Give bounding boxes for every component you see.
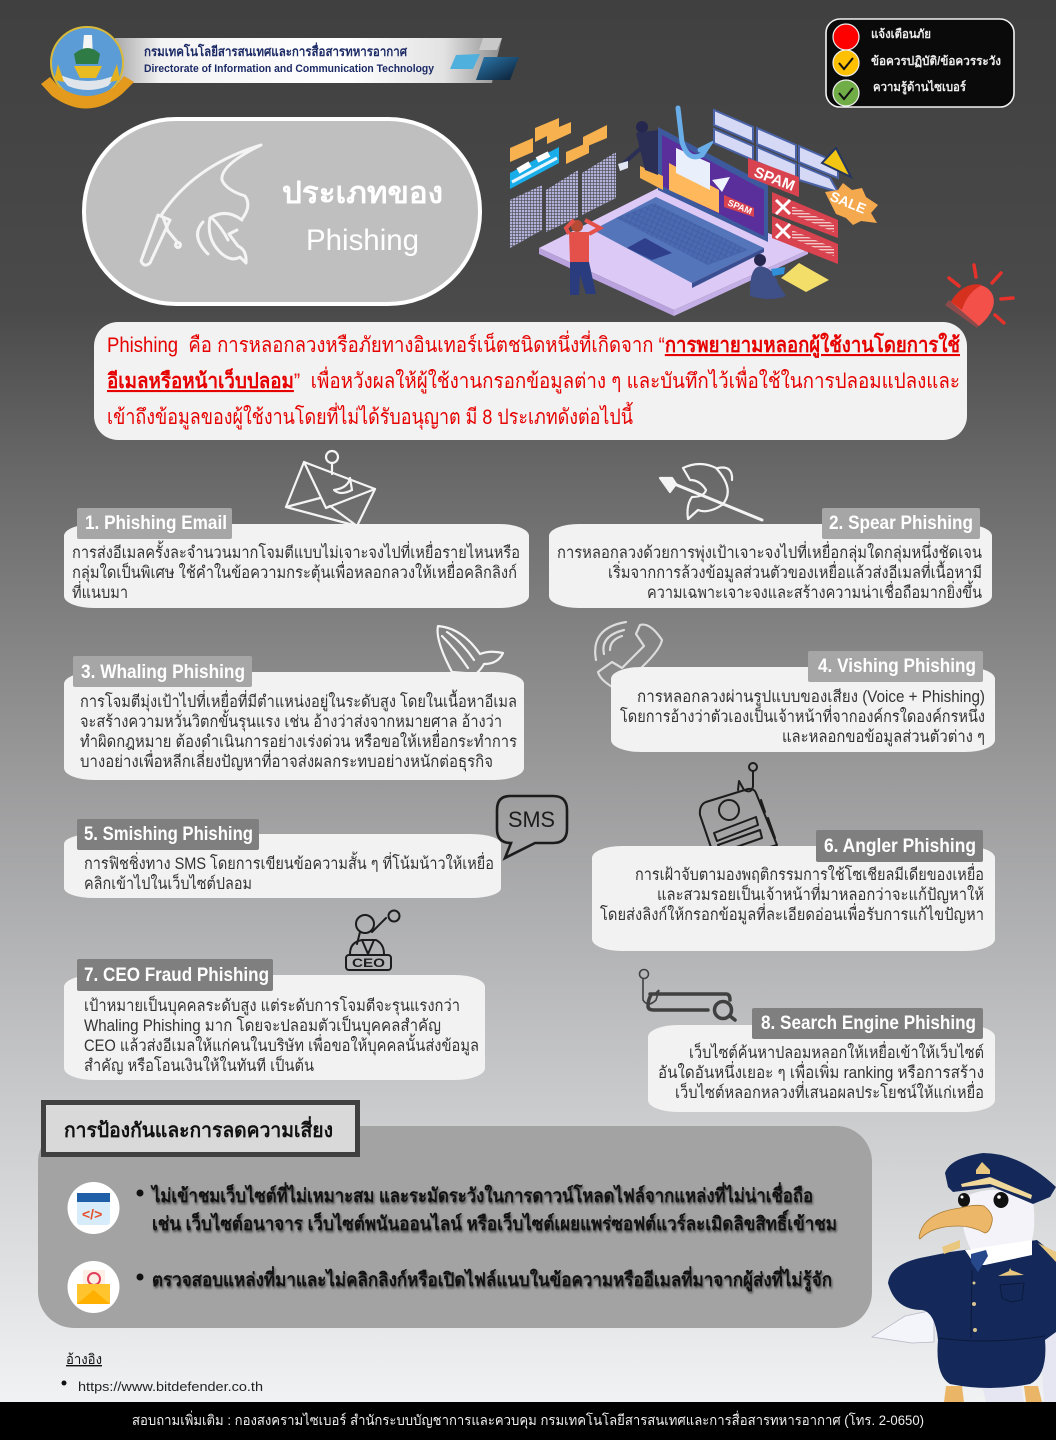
card 8: Search Engine Phishing (648, 1008, 995, 1112)
tag (822, 508, 980, 539)
tag: 1. Phishing Email (85, 513, 227, 534)
tag: 4. Vishing Phishing (818, 656, 976, 677)
card 6: Angler Phishing (592, 830, 995, 951)
platform (539, 187, 808, 310)
description: Whaling Phishing มาก โดยจะปลอมตัวเป็นบุคคลสำคัญ (84, 1015, 441, 1036)
icon: fishing rod and fish (141, 145, 261, 265)
description: เว็บไซต์ค้นหาปลอมหลอกให้เหยื่อเข้าให้เว็บไซต์ (689, 1041, 984, 1062)
intro line 2: อีเมลหรือหน้าเว็บปลอม” เพื่อหวังผลให้ผู้ใช้งานกรอกข้อมูลต่าง ๆ และบันทึกไว้เพื่อใช้ในการปลอมแปลงและ (107, 366, 960, 394)
laptop screen (658, 127, 768, 242)
hacker at screen (618, 121, 658, 175)
icon: email with hook (286, 451, 375, 526)
footer bar (0, 1402, 1056, 1440)
collar and tie (965, 1240, 1032, 1272)
description: คลิกเข้าไปในเว็บไซต์ปลอม (84, 873, 252, 893)
icon: SMS speech bubble: SMS (508, 807, 555, 832)
description: การหลอกลวงด้วยการพุ่งเป้าเจาะจงไปที่เหยื่อกลุ่มใดกลุ่มหนึ่งชัดเจน (557, 541, 982, 563)
icon: speared fish (660, 464, 762, 520)
virus warning panels (772, 192, 838, 264)
tag: 5. Smishing Phishing (84, 824, 253, 845)
description: และสวมรอยเป็นเจ้าหน้าที่มาหลอกว่าจะแก้ปัญหาให้ (657, 883, 984, 904)
description: บางอย่างเพื่อหลีกเลี่ยงปัญหาที่อาจส่งผลกระทบอย่างหนักต่อธุรกิจ (80, 750, 493, 772)
header logo banner (41, 27, 519, 109)
bullet 1 (136, 1182, 837, 1235)
icon: CEO figure: CEO (352, 956, 385, 970)
description (80, 689, 517, 772)
description: การหลอกลวงผ่านรูปแบบของเสียง (Voice + Phishing) (637, 688, 985, 707)
description (72, 540, 520, 602)
description: การเฝ้าจับตามองพฤติกรรมการใช้โซเชียลมีเดียของเหยื่อ (635, 863, 984, 884)
beak (919, 1205, 992, 1239)
description: การฟิชชิ่งทาง SMS โดยการเขียนข้อความสั้น ๆ ที่โน้มน้าวให้เหยื่อ (84, 851, 494, 873)
air force emblem (41, 27, 134, 109)
intro text box (94, 322, 967, 440)
tag (77, 959, 273, 991)
description (620, 688, 985, 747)
icon: code window: </> (82, 1206, 102, 1222)
intro line 1: Phishing คือ การหลอกลวงหรือภัยทางอินเทอร์เน็ตชนิดหนึ่งที่เกิดจาก “การพยายามหลอกผู้ใช้งานโดยการใช้ (107, 330, 960, 359)
description: โดยส่งลิงก์ให้กรอกข้อมูลที่ละเอียดอ่อนเพื่อรับการแก้ไขปัญหา (600, 903, 984, 925)
panel: prevention and risk reduction (38, 1102, 872, 1328)
tag (77, 508, 232, 539)
title Phishing: Phishing (306, 224, 419, 257)
icon: CEO figure (346, 910, 400, 970)
tag (816, 830, 983, 862)
description: เริ่มจากการล้วงข้อมูลส่วนตัวของเหยื่อแล้วส่งอีเมลที่เนื้อหามี (608, 560, 982, 583)
spam tags: SPAM (726, 198, 753, 216)
cap (945, 1153, 1056, 1204)
epaulettes (942, 1240, 1056, 1262)
legend: knowledge: ความรู้ด้านไซเบอร์ (873, 79, 967, 95)
title pill (84, 119, 480, 304)
department name English: Directorate of Information and Communication Technology (144, 63, 435, 75)
sale burst: SALE (828, 188, 868, 217)
tag: 8. Search Engine Phishing (761, 1013, 976, 1034)
warning triangle (822, 148, 851, 177)
description (84, 995, 479, 1075)
seated hacker (750, 254, 786, 299)
icon: code window (68, 1182, 120, 1234)
wing (872, 1310, 934, 1343)
decorative chips (450, 38, 519, 80)
intro line 3: เข้าถึงข้อมูลของผู้ใช้งานโดยที่ไม่ได้รับอนุญาต มี 8 ประเภทดังต่อไปนี้ (107, 402, 633, 430)
icon: profile card with hook (700, 763, 777, 862)
legend: warning: แจ้งเตือนภัย (871, 27, 931, 41)
department name Thai: กรมเทคโนโลยีสารสนเทศและการสื่อสารทหารอากาศ (144, 42, 408, 59)
sale burst (825, 183, 878, 225)
legend: advice (833, 50, 1001, 76)
description: การส่งอีเมลครั้งละจำนวนมากโจมตีแบบไม่เจาะจงไปที่เหยื่อรายไหนหรือ (72, 540, 520, 562)
description: อันใดอันหนึ่งเยอะ ๆ เพื่อเพิ่ม ranking หรือการสร้าง (658, 1061, 984, 1082)
banner ribbon (115, 38, 502, 83)
spam windows (714, 110, 838, 192)
footer bar: สอบถามเพิ่มเติม : กองสงครามไซเบอร์ สำนักระบบบัญชาการและควบคุม กรมเทคโนโลยีสารสนเทศและการสื่อสารทหารอากาศ (โทร. 2-0650) (132, 1411, 924, 1429)
description: CEO แล้วส่งอีเมลให้แก่คนในบริษัท เพื่อขอให้บุคคลนั้นส่งข้อมูล (84, 1033, 479, 1056)
legs (944, 1386, 1042, 1402)
head (960, 1190, 1034, 1258)
tag: 3. Whaling Phishing (81, 662, 245, 683)
card 5: Smishing Phishing (64, 819, 501, 898)
card 3: Whaling Phishing (64, 656, 524, 780)
reference link: https://www.bitdefender.co.th (78, 1379, 263, 1394)
card 2: Spear Phishing (549, 508, 992, 608)
tag (73, 656, 252, 687)
icon: search bar with hook (640, 970, 735, 1020)
icon: fishing hook (678, 108, 708, 157)
yellow folder (781, 263, 829, 292)
badge and buttons (938, 1268, 1045, 1341)
description: ทำผิดกฎหมาย ต้องดำเนินการอย่างเร่งด่วน หรือขอให้เหยื่อกระทำการ (80, 730, 517, 751)
legend: knowledge (833, 79, 967, 106)
tag (808, 651, 983, 682)
prevention heading (44, 1102, 358, 1154)
description: ที่แนบมา (72, 581, 128, 602)
legend: warning (833, 24, 931, 50)
icon: phone with signal (595, 622, 662, 688)
icon: alarm light (945, 265, 1013, 328)
title Thai: ประเภทของ (282, 177, 443, 210)
spam tags: SPAM (752, 164, 797, 195)
laptop base (593, 197, 764, 288)
icon: whale (438, 626, 503, 674)
body (888, 1240, 1056, 1388)
icon: SMS speech bubble (497, 796, 567, 858)
reference heading: อ้างอิง (66, 1351, 102, 1367)
card 4: Vishing Phishing (611, 651, 995, 752)
description: เว็บไซต์หลอกหลวงที่เสนอผลประโยชน์ให้แก่เหยื่อ (675, 1081, 984, 1102)
spam tags (724, 158, 799, 217)
tag: 2. Spear Phishing (829, 513, 973, 534)
mascot: seagull pilot (872, 1153, 1056, 1402)
description (600, 863, 984, 925)
bullet 1: เช่น เว็บไซต์อนาจาร เว็บไซต์พนันออนไลน์ หรือเว็บไซต์เผยแพร่ซอฟต์แวร์ละเมิดลิขสิทธิ์เข้าชม (152, 1209, 837, 1235)
description: การโจมตีมุ่งเป้าไปที่เหยื่อที่มีตำแหน่งอยู่ในระดับสูง โดยในเนื้อหาอีเมล (80, 689, 517, 712)
description: กลุ่มใดเป็นพิเศษ ใช้คำในข้อความกระตุ้นเพื่อหลอกลวงให้เหยื่อคลิกลิงก์ (72, 561, 517, 583)
description (557, 541, 982, 602)
description: ความเฉพาะเจาะจงและสร้างความน่าเชื่อถือมากยิ่งขึ้น (647, 580, 982, 602)
card 1: Phishing Email (64, 508, 529, 608)
envelopes and malware card (510, 118, 607, 189)
description (84, 851, 494, 893)
description (658, 1041, 984, 1102)
bullet 2: ตรวจสอบแหล่งที่มาและไม่คลิกลิงก์หรือเปิดไฟล์แนบในข้อความหรืออีเมลที่มาจากผู้ส่งที่ไม่รู้จัก (152, 1266, 832, 1292)
description: โดยการอ้างว่าตัวเองเป็นเจ้าหน้าที่จากองค์กรใดองค์กรหนึ่ง (620, 705, 985, 726)
legend box (826, 19, 1014, 107)
person in red shirt (566, 220, 600, 295)
description: เป้าหมายเป็นบุคคลระดับสูง แต่ระดับการโจมตีจะรุนแรงกว่า (84, 995, 460, 1016)
prevention heading: การป้องกันและการลดความเสี่ยง (64, 1115, 333, 1142)
tag: 7. CEO Fraud Phishing (84, 965, 269, 986)
card 7: CEO Fraud Phishing (64, 959, 485, 1080)
hero illustration: laptop phishing scene (510, 108, 878, 316)
tag: 6. Angler Phishing (824, 836, 976, 857)
tag (752, 1008, 983, 1039)
icon: mail with link (68, 1261, 120, 1313)
bullet 1: ไม่เข้าชมเว็บไซต์ที่ไม่เหมาะสม และระมัดระวังในการดาวน์โหลดไฟล์จากแหล่งที่ไม่น่าเชื่อถือ (150, 1182, 813, 1207)
data matrix columns (510, 152, 616, 248)
description: จะสร้างความหวั่นวิตกขั้นรุนแรง เช่น อ้างว่าส่งจากหมายศาล อ้างว่า (80, 709, 502, 732)
envelope with paper (640, 148, 730, 213)
description: สำคัญ หรือโอนเงินให้ในทันที เป็นต้น (84, 1055, 314, 1075)
description: และหลอกขอข้อมูลส่วนตัวต่าง ๆ (782, 728, 985, 747)
eyes (958, 1192, 1008, 1208)
tag (77, 819, 259, 850)
legend: advice: ข้อควรปฏิบัติ/ข้อควรระวัง (871, 54, 1001, 68)
